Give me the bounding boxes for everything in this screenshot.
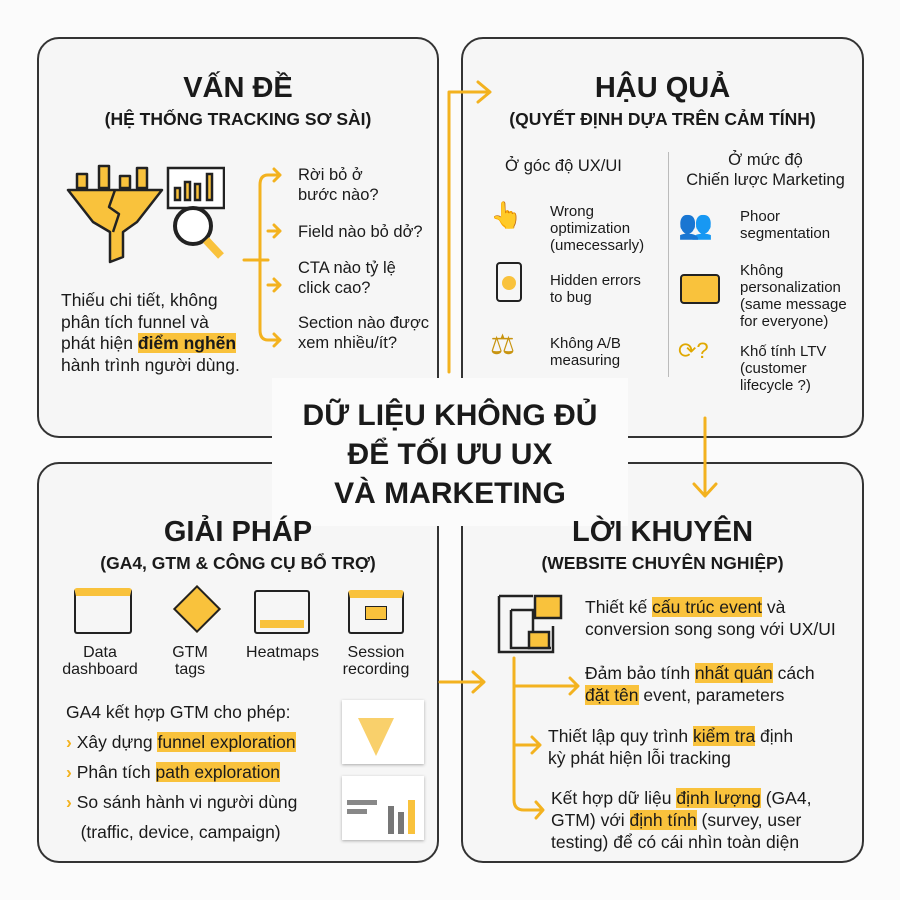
- text: problem description: phân tích funnel và: [61, 312, 209, 332]
- text: problem description: [61, 290, 240, 374]
- icons: tools: Data: [83, 644, 117, 661]
- text: xem nhiều/ít?: [298, 334, 397, 352]
- text: GTM) với định tính (survey, user: [551, 810, 801, 830]
- panel: consequences: [461, 37, 864, 438]
- text: problem description: hành trình người dùng.: [61, 354, 240, 374]
- icon: broken funnel: [66, 164, 225, 264]
- text: GA4 list: › So sánh hành vi người dùng: [66, 792, 297, 812]
- text: GA4 list: › Phân tích path exploration: [66, 762, 280, 782]
- text: Thiết lập quy trình kiểm tra định: [548, 726, 793, 746]
- text: GA4 list: GA4 kết hợp GTM cho phép:: [66, 702, 291, 722]
- icon: blueprint puzzle: [498, 594, 562, 654]
- heading: HẬU QUẢ: HẬU QUẢ: [595, 72, 730, 104]
- icons: tools: Session: [348, 644, 404, 661]
- column: marketing: segmentation: [740, 225, 830, 242]
- column: UX/UI: Hidden errors: [550, 272, 641, 289]
- heading: VẤN ĐỀ: (HỆ THỐNG TRACKING SƠ SÀI): [105, 109, 371, 129]
- column: UX/UI: Ở góc độ UX/UI: [505, 157, 622, 175]
- text: kỳ phát hiện lỗi tracking: [548, 748, 731, 768]
- text: click cao?: [298, 279, 370, 297]
- icon: scale: ⚖: [490, 329, 515, 360]
- heading: GIẢI PHÁP: (GA4, GTM & CÔNG CỤ BỔ TRỢ): [100, 553, 376, 573]
- text: advice items: Thiết kế cấu trúc event và: [585, 597, 785, 617]
- icon: dashboard with magnifier: [168, 168, 224, 256]
- icon: chat: [680, 274, 720, 304]
- text: Section nào được: [298, 314, 429, 332]
- column: marketing: Chiến lược Marketing: [686, 171, 845, 189]
- icons: tools: dashboard: [62, 661, 138, 678]
- column: marketing: (customer: [740, 360, 807, 377]
- text: testing) để có cái nhìn toàn diện: [551, 832, 799, 852]
- column: UX/UI: Wrong: [550, 203, 594, 220]
- icon: cycle: ⟳?: [678, 338, 709, 363]
- icon: phone bug: [496, 262, 522, 302]
- icons: tools: GTM: [172, 644, 208, 661]
- text: GA4 list: › Xây dựng funnel exploration: [66, 732, 296, 752]
- column: marketing: lifecycle ?): [740, 377, 811, 394]
- center title backdrop: [272, 378, 628, 526]
- heading: LỜI KHUYÊN: [541, 515, 784, 573]
- heading: LỜI KHUYÊN: (WEBSITE CHUYÊN NGHIỆP): [541, 553, 784, 573]
- column: UX/UI: optimization: [550, 220, 630, 237]
- heading: GIẢI PHÁP: GIẢI PHÁP: [164, 516, 312, 548]
- chart thumbnails: [342, 700, 424, 764]
- text: GA4 list: (traffic, device, campaign): [81, 822, 281, 842]
- column: marketing: Không: [740, 262, 783, 279]
- heading: LỜI KHUYÊN: LỜI KHUYÊN: [572, 516, 753, 548]
- text: questions: bước nào?: [298, 186, 379, 204]
- column: marketing: Khố tính LTV: [740, 343, 826, 360]
- icons: tools: Heatmaps: [246, 644, 319, 661]
- heading: HẬU QUẢ: (QUYẾT ĐỊNH DỰA TRÊN CẢM TÍNH): [509, 109, 816, 129]
- center title: [303, 398, 597, 510]
- center title: DỮ LIỆU KHÔNG ĐỦ: [303, 399, 597, 432]
- icons: tools: tags: [175, 661, 205, 678]
- text: questions: [298, 166, 379, 204]
- text: đặt tên event, parameters: [585, 685, 784, 705]
- column: UX/UI: (umecessarly): [550, 237, 644, 254]
- text: Field nào bỏ dở?: [298, 223, 423, 241]
- column: UX/UI: [490, 156, 644, 369]
- icons: tools: recording: [343, 661, 409, 678]
- icons: tools: [62, 585, 409, 678]
- text: Kết hợp dữ liệu định lượng (GA4,: [551, 788, 811, 808]
- column: marketing: personalization: [740, 279, 841, 296]
- column: marketing: for everyone): [740, 313, 828, 330]
- column: marketing: [678, 150, 847, 394]
- heading: VẤN ĐỀ: [105, 71, 371, 129]
- text: GA4 list: [66, 702, 297, 842]
- text: problem description: phát hiện điểm nghẽn: [61, 333, 236, 353]
- text: problem description: Thiếu chi tiết, không: [61, 290, 218, 310]
- text: Đảm bảo tính nhất quán cách: [585, 663, 815, 683]
- heading: GIẢI PHÁP: [100, 515, 376, 573]
- column: marketing: (same message: [740, 296, 847, 313]
- column: UX/UI: to bug: [550, 289, 592, 306]
- text: advice items: [585, 597, 836, 639]
- heading: VẤN ĐỀ: VẤN ĐỀ: [183, 72, 293, 104]
- column: marketing: Phoor: [740, 208, 780, 225]
- text: advice items: conversion song song với UX/UI: [585, 619, 836, 639]
- icon: hand click: 👆: [490, 200, 522, 230]
- panel: solution: [37, 462, 439, 863]
- column: UX/UI: measuring: [550, 352, 620, 369]
- panel: problem: [37, 37, 439, 438]
- column: marketing: Ở mức độ: [728, 151, 803, 169]
- text: questions: Rời bỏ ở: [298, 166, 363, 184]
- icon: people: 👥: [678, 209, 713, 240]
- heading: HẬU QUẢ: [509, 71, 816, 129]
- panel: advice: [461, 462, 864, 863]
- text: CTA nào tỷ lệ: [298, 259, 396, 277]
- divider: [668, 152, 669, 377]
- column: UX/UI: Không A/B: [550, 335, 621, 352]
- center title: ĐỂ TỐI ƯU UX: [348, 438, 552, 471]
- center title: VÀ MARKETING: [334, 477, 566, 510]
